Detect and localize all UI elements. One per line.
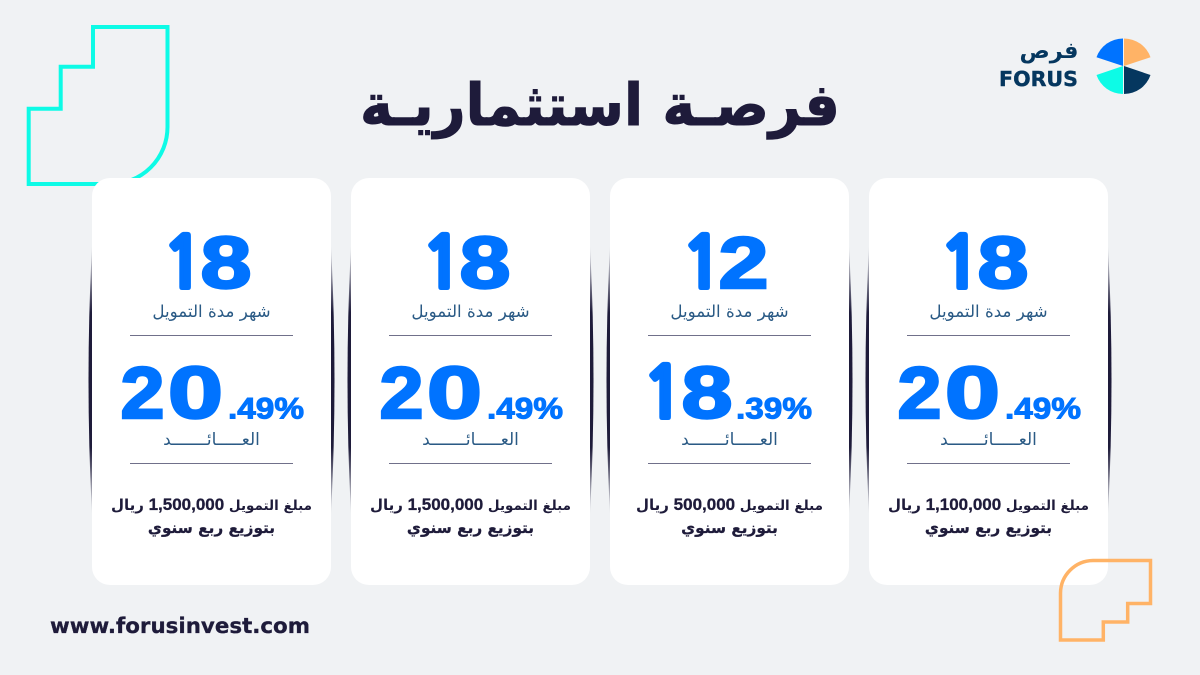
duration number bbox=[421, 223, 510, 304]
duration number: 1 bbox=[681, 228, 724, 299]
return number bbox=[120, 353, 223, 434]
duration number: 2 bbox=[718, 223, 768, 304]
duration number: 1 bbox=[421, 228, 464, 299]
duration number: 1 bbox=[939, 228, 982, 299]
duration number: 8 bbox=[200, 223, 252, 304]
panel: card 1 bbox=[88, 178, 334, 585]
panel: card 4 bbox=[866, 178, 1112, 585]
return label: العـــــائـــــــد bbox=[163, 430, 260, 450]
funding amount: مبلغ التمويل 1,500,000 ريال bbox=[111, 495, 312, 514]
return decimal: .49% bbox=[487, 392, 563, 426]
funding amount: مبلغ التمويل 1,500,000 ريال bbox=[370, 495, 571, 514]
panel: card 3 bbox=[606, 178, 852, 585]
return label: العـــــائـــــــد bbox=[681, 430, 778, 450]
return number: 2 bbox=[898, 353, 942, 434]
duration number bbox=[162, 223, 252, 304]
return number: 1 bbox=[642, 358, 685, 429]
icon: orange stepped outline bbox=[1060, 560, 1150, 640]
funding amount: مبلغ التمويل 1,100,000 ريال bbox=[888, 495, 1089, 514]
return number: 0 bbox=[427, 353, 482, 434]
return label: العـــــائـــــــد bbox=[422, 430, 519, 450]
duration label: شهر مدة التمويل bbox=[670, 301, 789, 322]
duration label: شهر مدة التمويل bbox=[152, 301, 271, 322]
return label: العـــــائـــــــد bbox=[940, 430, 1037, 450]
return number: 2 bbox=[120, 353, 164, 434]
return decimal: .49% bbox=[1005, 392, 1081, 426]
return number bbox=[898, 353, 1000, 434]
duration label: شهر مدة التمويل bbox=[411, 301, 530, 322]
return number bbox=[380, 353, 482, 434]
duration number: 1 bbox=[162, 228, 205, 299]
return number: 2 bbox=[380, 353, 424, 434]
logo: Forus bbox=[999, 38, 1150, 94]
distribution: بتوزيع ربع سنوي bbox=[925, 519, 1052, 538]
panel: card 2 bbox=[348, 178, 594, 585]
icon: teal stepped outline bbox=[29, 27, 168, 184]
website url: www.forusinvest.com bbox=[50, 614, 310, 638]
logo: Forus: FORUS bbox=[999, 67, 1078, 91]
duration number: 8 bbox=[978, 223, 1028, 304]
duration number bbox=[939, 223, 1028, 304]
distribution: بتوزيع ربع سنوي bbox=[407, 519, 534, 538]
title: فرصـة استثماريـة bbox=[360, 71, 840, 140]
return decimal: .49% bbox=[228, 392, 304, 426]
duration label: شهر مدة التمويل bbox=[929, 301, 1048, 322]
duration number bbox=[681, 223, 768, 304]
return number: 0 bbox=[168, 353, 223, 434]
return decimal: .39% bbox=[736, 392, 812, 426]
return number bbox=[642, 353, 732, 434]
distribution: بتوزيع ربع سنوي bbox=[148, 519, 275, 538]
funding amount: مبلغ التمويل 500,000 ريال bbox=[636, 495, 823, 514]
duration number: 8 bbox=[460, 223, 510, 304]
logo: Forus: فرص bbox=[1020, 38, 1078, 64]
return number: 8 bbox=[682, 353, 732, 434]
distribution: بتوزيع سنوي bbox=[681, 519, 778, 538]
return number: 0 bbox=[945, 353, 1000, 434]
